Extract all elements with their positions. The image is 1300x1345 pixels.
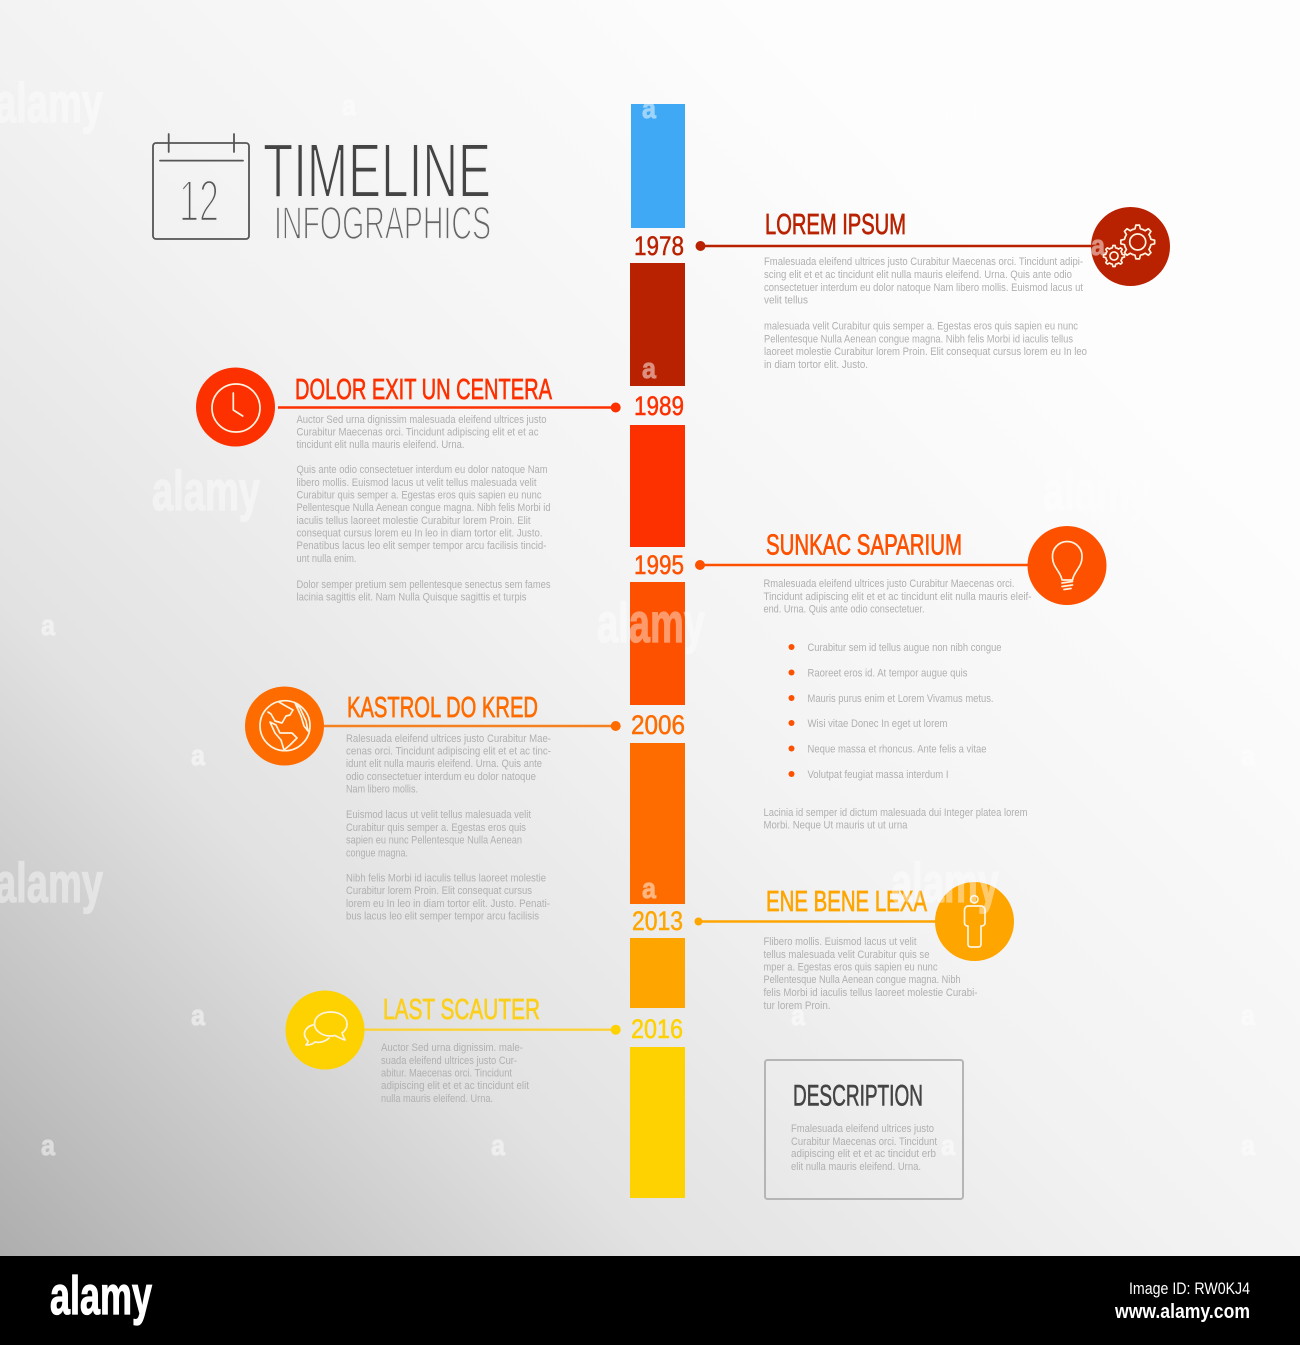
body text: cenas orci. Tincidunt adipiscing elit et et ac tinc-	[346, 746, 551, 758]
body text: felis Morbi id iaculis tellus laoreet molestie Curabi-	[764, 987, 978, 999]
body text: Tincidunt adipiscing elit et et ac tincidunt elit nulla mauris eleif-	[764, 591, 1032, 603]
body text: Pellentesque Nulla Aenean congue magna. Nibh felis Morbi id iaculis tellus	[764, 334, 1073, 346]
body text: Pellentesque Nulla Aenean congue magna. Nibh	[764, 974, 960, 986]
connector	[700, 245, 1095, 247]
body text: Curabitur quis semper a. Egestas eros quis	[346, 822, 526, 834]
icon: clock	[196, 368, 275, 446]
body text	[346, 733, 551, 922]
footer bar	[0, 1256, 1300, 1345]
body text: idunt elit nulla mauris eleifend. Urna. Quis ante	[346, 758, 542, 770]
heading: SUNKAC SAPARIUM	[766, 530, 962, 562]
watermarks: alamy	[891, 851, 999, 914]
body text: libero mollis. Euismod lacus ut velit tellus malesuada velit	[296, 477, 536, 489]
watermarks: a	[642, 93, 657, 125]
body text: tellus malesuada velit Curabitur quis se	[764, 949, 930, 961]
body text: iaculis tellus laoreet molestie Curabitur lorem Proin. Elit	[296, 515, 530, 527]
icon: globe	[245, 686, 324, 766]
body text: elit nulla mauris eleifend. Urna.	[791, 1161, 921, 1173]
title block	[153, 128, 491, 249]
entry: ene bene lexa	[694, 882, 1014, 1012]
year labels: 1978	[634, 231, 684, 261]
icon: calendar	[153, 134, 249, 239]
bullet list: Mauris purus enim et Lorem Vivamus metus.	[808, 693, 994, 705]
watermarks: alamy	[1043, 459, 1151, 522]
watermarks: a	[642, 353, 657, 385]
body text: suada eleifend ultrices justo Cur-	[381, 1055, 517, 1067]
connector	[700, 564, 1030, 566]
website: www.alamy.com	[1114, 1301, 1250, 1323]
body text: Rmalesuada eleifend ultrices justo Curabitur Maecenas orci.	[764, 578, 1014, 590]
body text: Auctor Sed urna dignissim. male-	[381, 1042, 523, 1054]
body text: mper a. Egestas eros quis sapien eu nunc	[764, 962, 938, 974]
year labels: 2016	[631, 1014, 683, 1044]
title: timeline: TIMELINE	[263, 128, 491, 214]
body text: Quis ante odio consectetuer interdum eu dolor natoque Nam	[296, 464, 548, 476]
body text: Ralesuada eleifend ultrices justo Curabitur Mae-	[346, 733, 551, 745]
bullet list: Neque massa et rhoncus. Ante felis a vitae	[808, 744, 986, 756]
watermarks	[0, 71, 1256, 1162]
heading: DESCRIPTION	[793, 1080, 923, 1112]
body text: end. Urna. Quis ante odio consectetuer.	[764, 604, 924, 616]
watermarks: a	[191, 740, 206, 772]
watermarks: a	[1241, 1130, 1256, 1162]
year labels: 2006	[631, 710, 685, 740]
watermarks: alamy	[152, 459, 260, 522]
body text: congue magna.	[346, 848, 408, 860]
body text: Curabitur Maecenas orci. Tincidunt adipiscing elit et et ac	[296, 426, 539, 438]
description box	[765, 1060, 963, 1199]
body text: laoreet molestie Curabitur lorem Proin. Elit consequat cursus lorem eu In leo	[764, 346, 1087, 358]
footer logo: alamy	[50, 1266, 152, 1326]
icon: light bulb	[1028, 526, 1106, 605]
body text: Curabitur quis semper a. Egestas eros quis sapien eu nunc	[296, 490, 542, 502]
watermarks: a	[1241, 740, 1256, 772]
watermarks: alamy	[597, 591, 705, 654]
connector	[360, 1028, 616, 1031]
watermarks: a	[642, 873, 657, 905]
watermarks: a	[41, 610, 56, 642]
bullet list: Raoreet eros id. At tempor augue quis	[808, 668, 968, 680]
body text: Pellentesque Nulla Aenean congue magna. Nibh felis Morbi id	[296, 502, 550, 514]
watermarks: alamy	[891, 71, 999, 134]
year labels: 1995	[634, 550, 684, 580]
watermarks: a	[791, 1000, 806, 1032]
watermarks: a	[491, 1130, 506, 1162]
year labels	[631, 231, 685, 1044]
closing text	[764, 807, 1028, 832]
body text: sapien eu nunc Pellentesque Nulla Aenean	[346, 834, 522, 846]
icon: speech bubbles	[286, 990, 364, 1070]
body text: Fmalesuada eleifend ultrices justo	[791, 1123, 934, 1135]
heading: LAST SCAUTER	[383, 994, 540, 1026]
body text	[296, 414, 551, 604]
body text: Curabitur Maecenas orci. Tincidunt	[791, 1136, 937, 1148]
icon: person	[935, 882, 1014, 961]
heading: DOLOR EXIT UN CENTERA	[295, 374, 552, 406]
body text: Dolor semper pretium sem pellentesque senectus sem fames	[296, 579, 551, 591]
heading: LOREM IPSUM	[765, 209, 906, 241]
body text: nulla mauris eleifend. Urna.	[381, 1093, 493, 1105]
body text: Auctor Sed urna dignissim malesuada eleifend ultrices justo	[296, 414, 546, 426]
body text: Flibero mollis. Euismod lacus ut velit	[764, 936, 916, 948]
bullet list: Curabitur sem id tellus augue non nibh congue	[808, 642, 1002, 654]
body text: odio consectetuer interdum eu dolor natoque	[346, 771, 536, 783]
watermarks: a	[191, 1000, 206, 1032]
body text: abitur. Maecenas orci. Tincidunt	[381, 1068, 512, 1080]
watermarks: a	[941, 1130, 956, 1162]
entry: lorem ipsum	[696, 207, 1170, 371]
body text: Fmalesuada eleifend ultrices justo Curabitur Maecenas orci. Tincidunt adipi-	[764, 256, 1083, 268]
body text: unt nulla enim.	[296, 553, 356, 565]
timeline bar	[630, 104, 685, 1198]
heading: KASTROL DO KRED	[347, 692, 538, 724]
body text	[764, 256, 1087, 371]
body text: Euismod lacus ut velit tellus malesuada velit	[346, 809, 531, 821]
body text: adipiscing elit et et ac tincidunt elit	[381, 1080, 529, 1092]
body text: Penatibus lacus leo elit semper tempor arcu facilisis tincid-	[296, 540, 547, 552]
body text: tur lorem Proin.	[764, 1000, 830, 1012]
connector	[699, 920, 940, 923]
body text	[381, 1042, 529, 1105]
watermarks: a	[1091, 230, 1106, 262]
connector	[320, 725, 616, 727]
body text: Nibh felis Morbi id iaculis tellus laoreet molestie	[346, 872, 546, 884]
body text: adipiscing elit et et ac tincidut erb	[791, 1148, 936, 1160]
body text: in diam tortor elit. Justo.	[764, 359, 868, 371]
body text	[764, 578, 1032, 616]
body text: bus lacus leo elit semper tempor arcu facilisis	[346, 910, 539, 922]
bullet list: Volutpat feugiat massa interdum I	[808, 769, 948, 781]
body text: consequat cursus lorem eu In leo in diam tortor elit. Justo.	[296, 528, 542, 540]
body text: lorem eu In leo in diam tortor elit. Justo. Penati-	[346, 898, 550, 910]
box outline	[765, 1060, 963, 1199]
watermarks: a	[41, 1130, 56, 1162]
watermarks: a	[342, 90, 357, 122]
body text: lacinia sagittis elit. Nam Nulla Quisque sagittis et turpis	[296, 592, 527, 604]
body text: malesuada velit Curabitur quis semper a. Egestas eros quis sapien eu nunc	[764, 320, 1078, 332]
entry: kastrol do kred	[245, 686, 621, 922]
entry: sunkac saparium	[695, 526, 1106, 832]
entry: dolor exit un centera	[196, 368, 621, 604]
closing text: Lacinia id semper id dictum malesuada dui Integer platea lorem	[764, 807, 1028, 819]
body text: consectetuer interdum eu dolor natoque Nam libero mollis. Euismod lacus ut	[764, 282, 1083, 294]
watermarks: a	[1241, 1000, 1256, 1032]
calendar number: 12	[179, 169, 219, 234]
subtitle: infographics: INFOGRAPHICS	[274, 197, 491, 249]
year labels: 2013	[632, 906, 683, 936]
body text	[764, 936, 978, 1012]
image id: Image ID: RW0KJ4	[1129, 1279, 1250, 1298]
entry: last scauter	[286, 990, 621, 1105]
bullet list	[788, 642, 1002, 781]
heading: ENE BENE LEXA	[766, 886, 927, 918]
bullet list: Wisi vitae Donec In eget ut lorem	[808, 718, 948, 730]
icon: gears	[1091, 207, 1170, 286]
year labels: 1989	[634, 391, 684, 421]
body text: Curabitur lorem Proin. Elit consequat cursus	[346, 885, 532, 897]
body text: Nam libero mollis.	[346, 784, 418, 796]
closing text: Morbi. Neque Ut mauris ut ut urna	[764, 820, 908, 832]
connector	[278, 406, 616, 409]
body text	[791, 1123, 937, 1173]
body text: tincidunt elit nulla mauris eleifend. Urna.	[296, 439, 464, 451]
body text: velit tellus	[764, 294, 808, 306]
body text: scing elit et et ac tincidunt elit nulla mauris eleifend. Urna. Quis ante odio	[764, 269, 1072, 281]
